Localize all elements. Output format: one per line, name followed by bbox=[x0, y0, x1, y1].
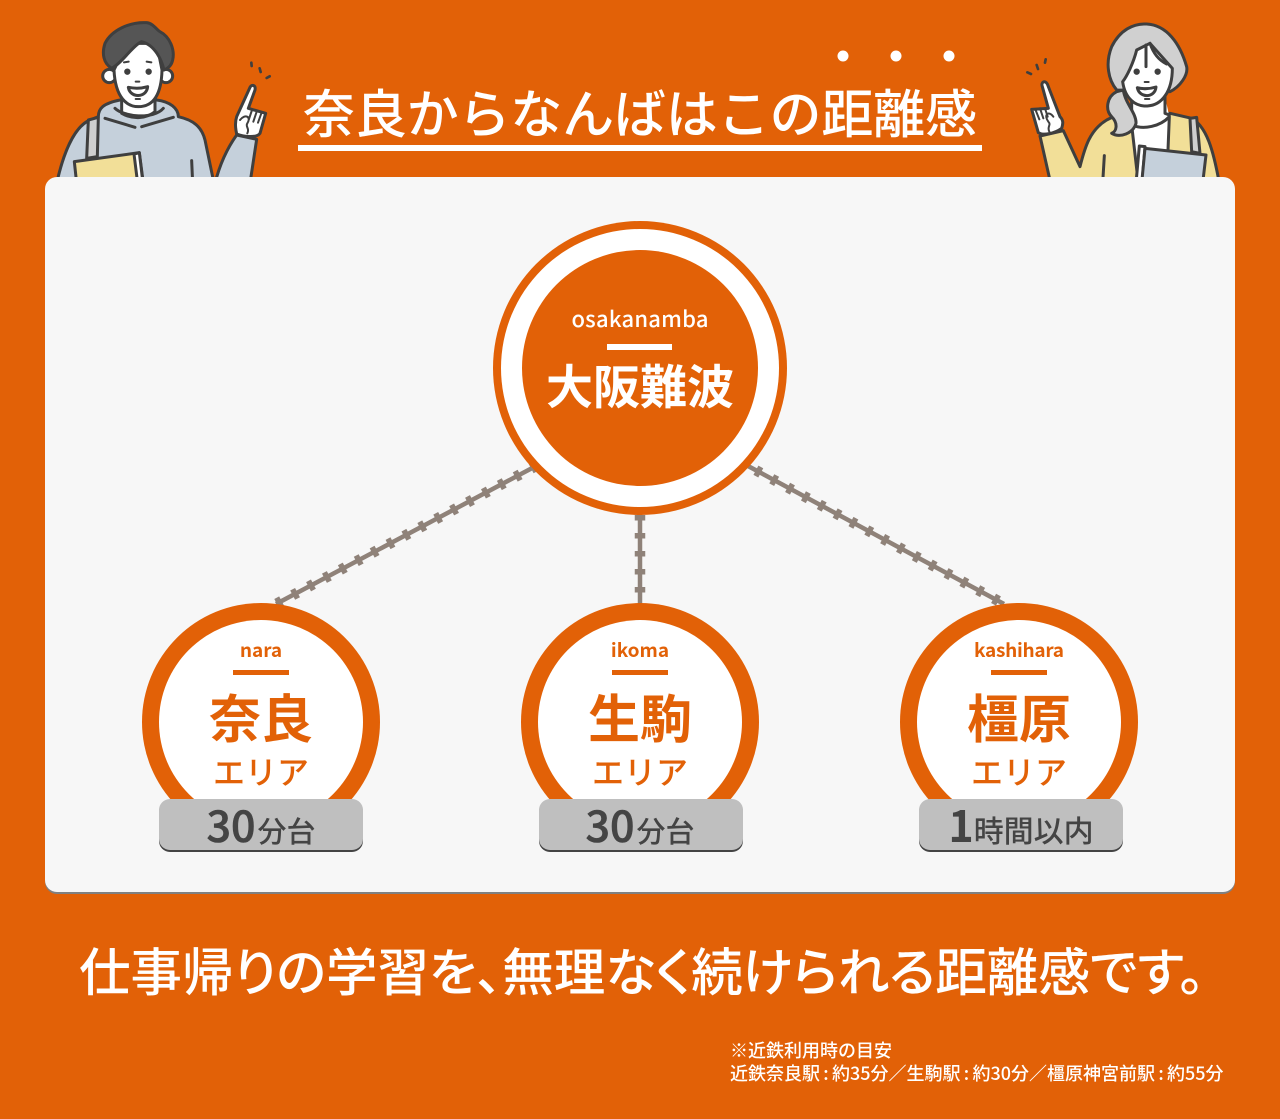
panel: route map bbox=[45, 177, 1235, 894]
area: nara bbox=[142, 603, 380, 855]
area: ikoma bbox=[521, 603, 759, 855]
hub: osaka namba: 大阪難波 bbox=[546, 349, 734, 418]
area: ikoma: 30分台 bbox=[585, 793, 695, 855]
area: nara: 30分台 bbox=[206, 793, 316, 855]
rail line: namba to nara bbox=[276, 466, 536, 604]
area: kashihara bbox=[900, 603, 1138, 855]
illustration: man pointing bbox=[57, 23, 270, 183]
tagline: 仕事帰りの学習を、無理なく続けられる距離感です。 bbox=[79, 931, 1205, 1006]
title: 奈良からなんばはこの距離感 bbox=[303, 73, 977, 148]
footnote: 近鉄奈良駅:約35分／生駒駅:約30分／橿原神宮前駅:約55分 bbox=[730, 1060, 1224, 1086]
area: kashihara: エリア bbox=[971, 748, 1067, 794]
hub: osaka namba: osakanamba bbox=[572, 302, 708, 334]
illustration: woman pointing bbox=[1027, 24, 1219, 183]
area: nara: nara bbox=[240, 636, 282, 663]
area: kashihara: 橿原 bbox=[967, 678, 1071, 753]
area: kashihara: kashihara bbox=[974, 636, 1064, 663]
area: ikoma: エリア bbox=[592, 748, 688, 794]
area: nara: エリア bbox=[213, 748, 309, 794]
rail line: namba to ikoma bbox=[638, 514, 642, 604]
area: ikoma: ikoma bbox=[611, 636, 669, 663]
footnote bbox=[730, 1037, 1224, 1086]
area: nara: 奈良 bbox=[209, 678, 313, 753]
rail line: namba to kashihara bbox=[748, 466, 1004, 604]
area: ikoma: 生駒 bbox=[588, 678, 692, 753]
hub: osaka namba bbox=[493, 221, 787, 515]
area: kashihara: 1時間以内 bbox=[948, 793, 1094, 855]
footnote: ※近鉄利用時の目安 bbox=[730, 1037, 892, 1063]
